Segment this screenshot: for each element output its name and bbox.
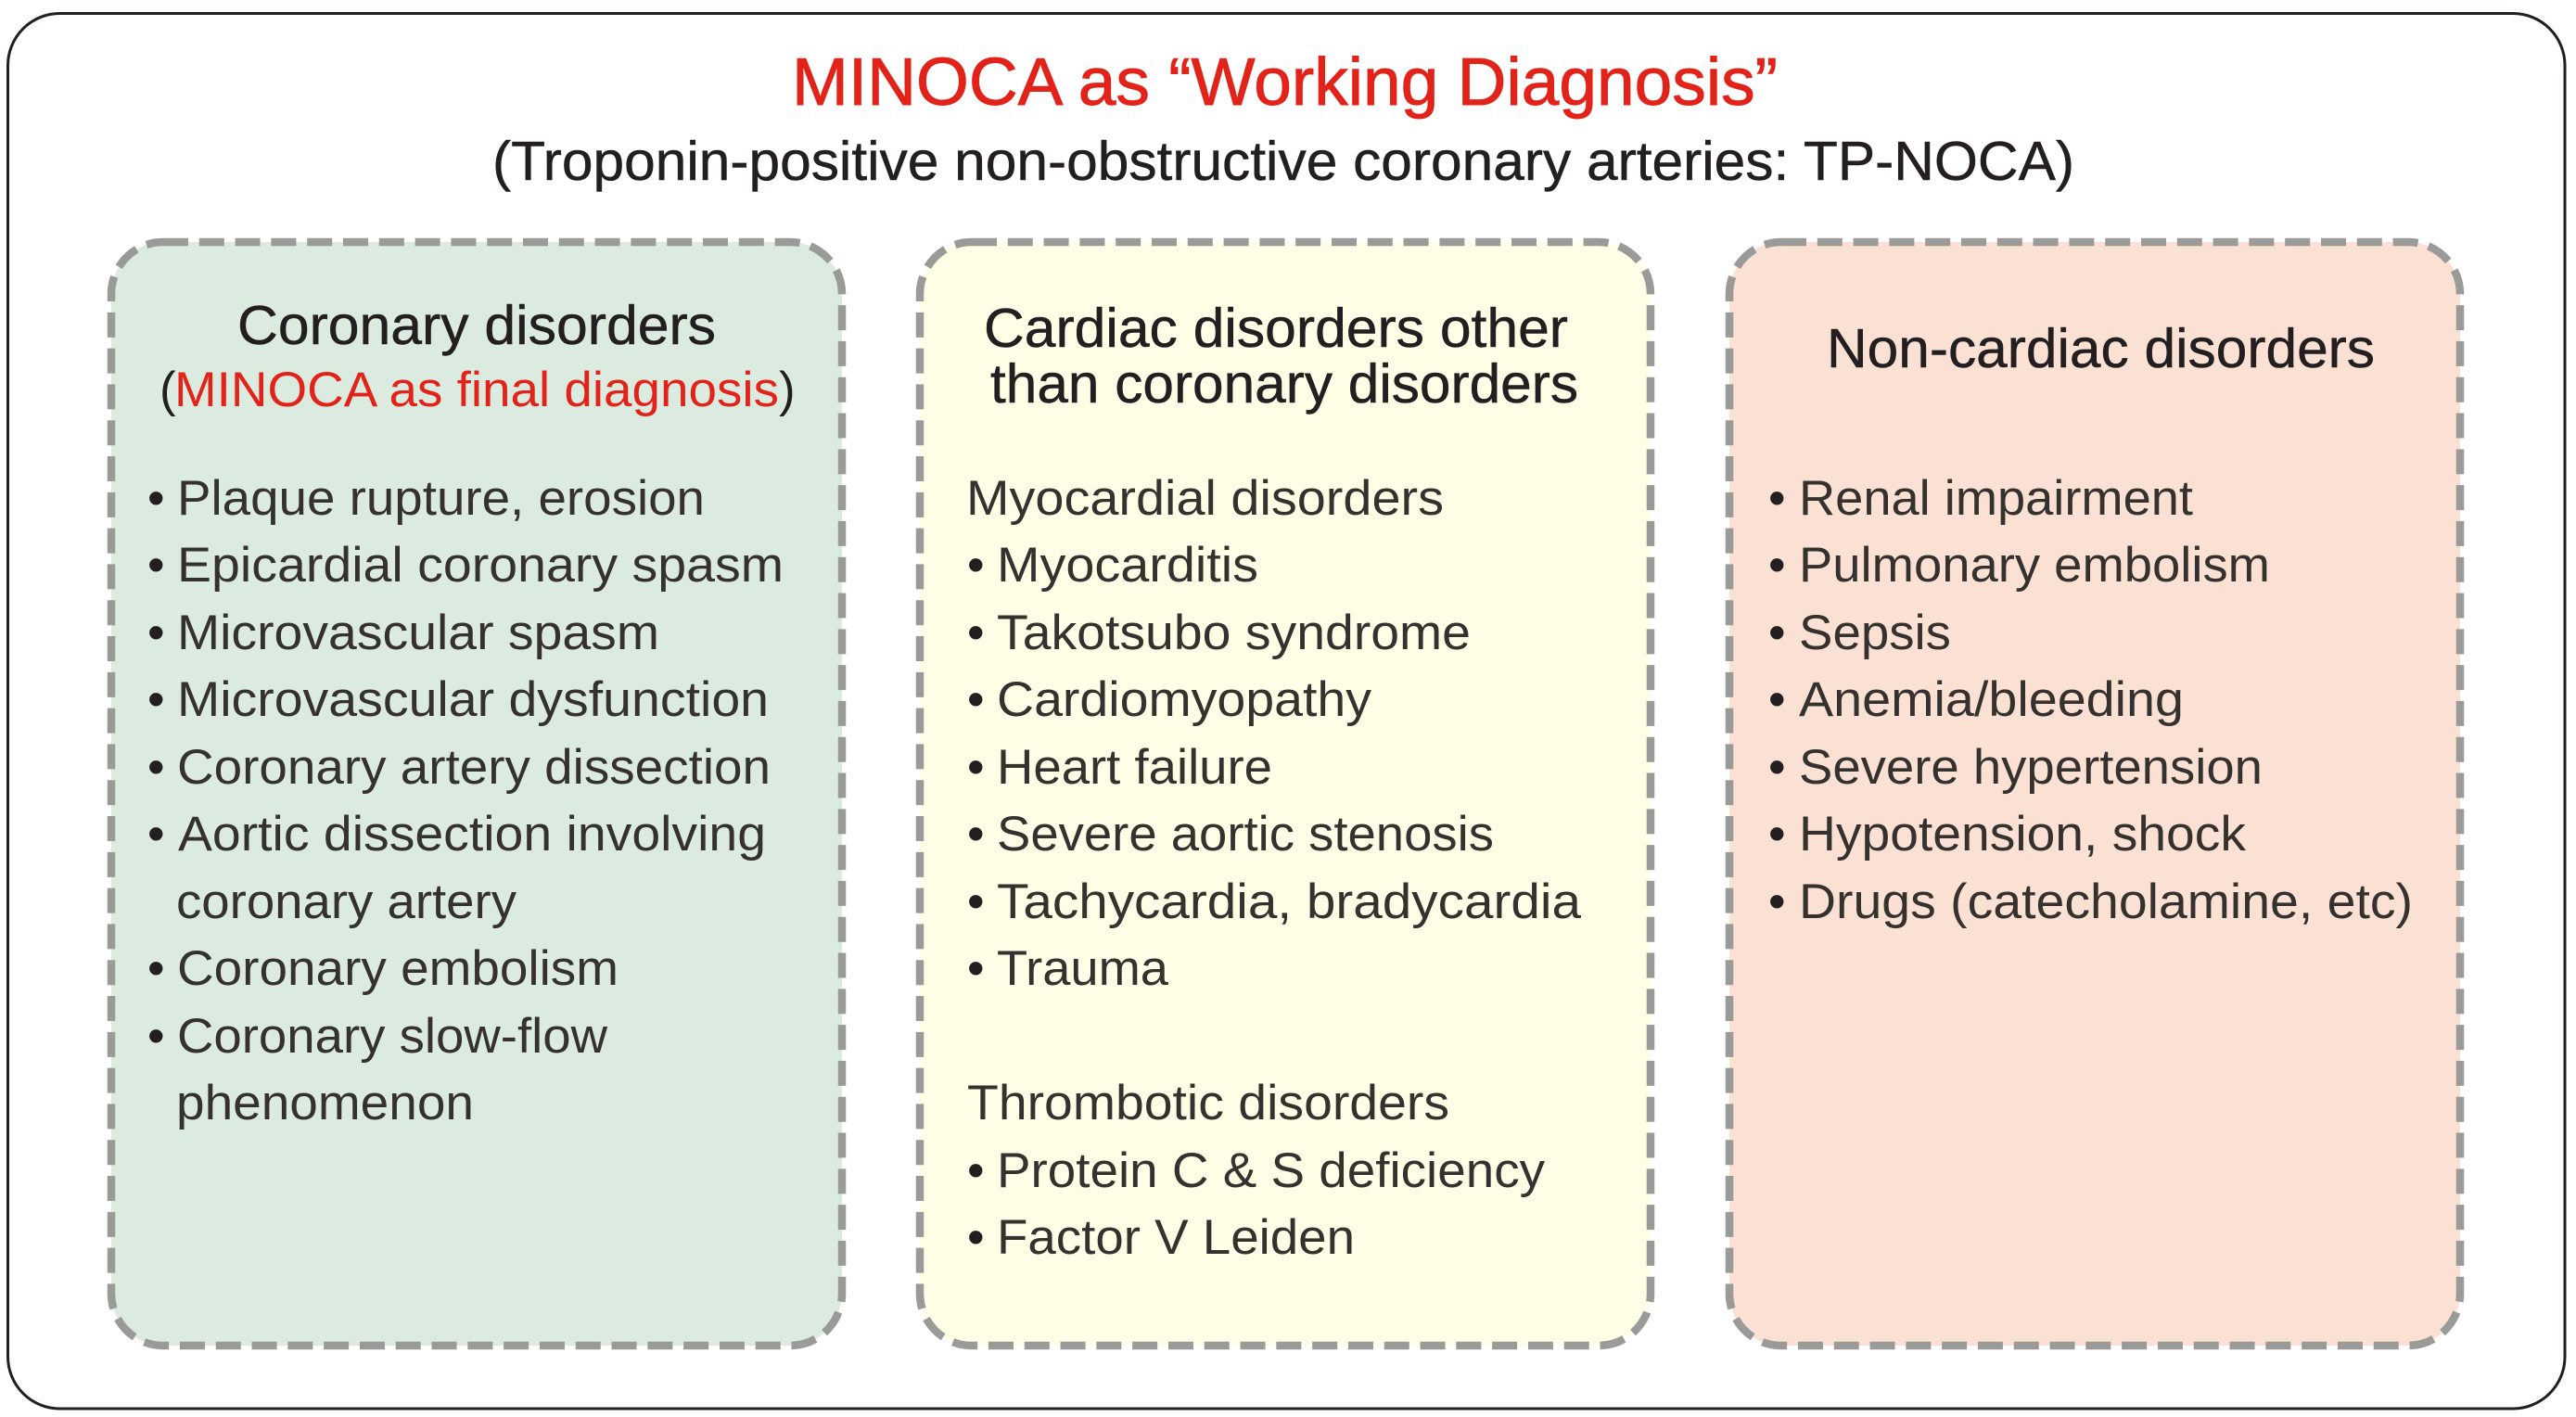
list: myocardial disorders: •: [967, 672, 985, 727]
list: thrombotic disorders: Factor V Leiden: [997, 1210, 1355, 1265]
list: myocardial disorders: •: [967, 606, 985, 660]
list: non-cardiac disorders: Pulmonary embolism: [1799, 538, 2270, 593]
heading: coronary disorders: (: [159, 363, 176, 417]
list: coronary disorders: Coronary slow-flow: [177, 1009, 608, 1064]
heading: coronary disorders: MINOCA as final diagnosis: [174, 363, 779, 417]
list: coronary disorders: •: [147, 672, 165, 727]
list: coronary disorders: •: [147, 740, 165, 795]
list: coronary disorders: •: [147, 471, 165, 526]
list: thrombotic disorders: [967, 1076, 1546, 1265]
list: coronary disorders: coronary artery: [176, 874, 517, 929]
heading: coronary disorders: Coronary disorders: [237, 295, 716, 356]
heading: cardiac disorders: Cardiac disorders other: [984, 298, 1568, 359]
list: non-cardiac disorders: •: [1768, 538, 1786, 593]
title: MINOCA as “Working Diagnosis”: [792, 45, 1778, 120]
list: myocardial disorders: •: [967, 740, 985, 795]
list: coronary disorders: Aortic dissection involving: [178, 807, 766, 862]
list: myocardial disorders: [966, 471, 1582, 996]
heading: cardiac disorders: than coronary disorders: [990, 353, 1578, 415]
heading: coronary disorders: ): [779, 363, 796, 417]
panel: non-cardiac disorders: [1729, 242, 2460, 1346]
list: myocardial disorders: Takotsubo syndrome: [997, 606, 1471, 660]
list: myocardial disorders: Tachycardia, bradycardia: [997, 874, 1582, 929]
list: coronary disorders: Microvascular spasm: [177, 606, 659, 660]
list: non-cardiac disorders: Anemia/bleeding: [1799, 672, 2184, 727]
list: non-cardiac disorders: Sepsis: [1799, 606, 1951, 660]
list: coronary disorders: •: [147, 1009, 165, 1064]
list: coronary disorders: •: [147, 606, 165, 660]
list: coronary disorders: Coronary artery dissection: [177, 740, 771, 795]
heading: non-cardiac disorders: Non-cardiac disorders: [1827, 318, 2375, 379]
list: myocardial disorders: •: [967, 941, 985, 996]
list: myocardial disorders: •: [967, 538, 985, 593]
list: thrombotic disorders: Thrombotic disorders: [967, 1076, 1449, 1130]
list: myocardial disorders: Severe aortic stenosis: [997, 807, 1494, 862]
heading: coronary disorders: [159, 295, 796, 417]
list: thrombotic disorders: •: [967, 1210, 985, 1265]
list: coronary disorders: Microvascular dysfunction: [177, 672, 769, 727]
panel: coronary disorders: [111, 242, 842, 1346]
list: non-cardiac disorders: •: [1768, 672, 1786, 727]
list: coronary disorders: [147, 471, 784, 1130]
list: myocardial disorders: •: [967, 807, 985, 862]
list: non-cardiac disorders: Renal impairment: [1799, 471, 2193, 526]
list: thrombotic disorders: •: [967, 1143, 985, 1198]
list: non-cardiac disorders: •: [1768, 807, 1786, 862]
list: non-cardiac disorders: •: [1768, 471, 1786, 526]
list: non-cardiac disorders: [1768, 471, 2413, 929]
list: non-cardiac disorders: Severe hypertension: [1799, 740, 2263, 795]
list: myocardial disorders: Trauma: [997, 941, 1169, 996]
list: non-cardiac disorders: •: [1768, 740, 1786, 795]
list: non-cardiac disorders: Hypotension, shock: [1799, 807, 2247, 862]
heading: cardiac disorders: [984, 298, 1578, 415]
list: coronary disorders: •: [147, 807, 165, 862]
list: myocardial disorders: •: [967, 874, 985, 929]
subtitle: (Troponin-positive non-obstructive coronary arteries: TP-NOCA): [492, 131, 2074, 192]
list: myocardial disorders: Myocardial disorders: [966, 471, 1444, 526]
list: coronary disorders: •: [147, 941, 165, 996]
list: myocardial disorders: Cardiomyopathy: [997, 672, 1372, 727]
panel: cardiac disorders: [920, 242, 1651, 1346]
list: myocardial disorders: Myocarditis: [997, 538, 1258, 593]
list: myocardial disorders: Heart failure: [997, 740, 1272, 795]
list: coronary disorders: phenomenon: [176, 1076, 474, 1130]
list: thrombotic disorders: Protein C & S deficiency: [997, 1143, 1546, 1198]
list: non-cardiac disorders: •: [1768, 874, 1786, 929]
list: coronary disorders: •: [147, 538, 165, 593]
list: non-cardiac disorders: Drugs (catecholamine, etc): [1799, 874, 2413, 929]
list: non-cardiac disorders: •: [1768, 606, 1786, 660]
list: coronary disorders: Coronary embolism: [177, 941, 618, 996]
list: coronary disorders: Plaque rupture, erosion: [177, 471, 705, 526]
list: coronary disorders: Epicardial coronary spasm: [177, 538, 784, 593]
